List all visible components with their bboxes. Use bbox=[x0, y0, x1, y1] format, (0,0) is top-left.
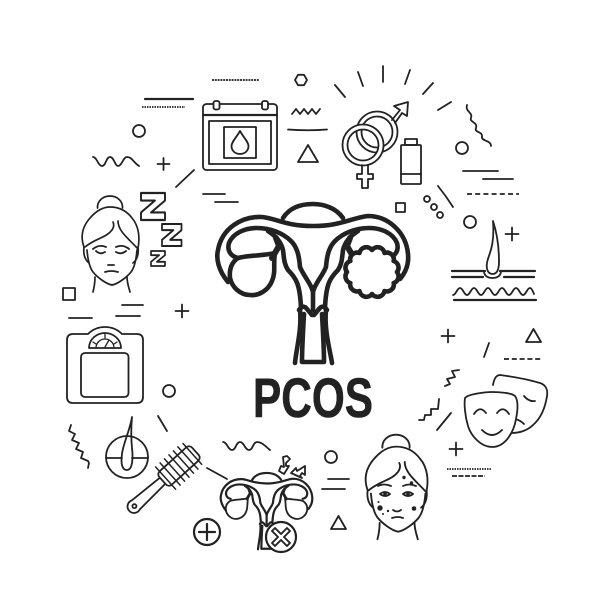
icon: plus in circle bbox=[194, 519, 220, 545]
acne spots bbox=[377, 476, 416, 515]
icon: hair follicle on skin bbox=[452, 221, 536, 300]
cross badge bbox=[266, 522, 296, 552]
eyes and mouth bbox=[378, 484, 416, 518]
icon: hair brush bbox=[119, 440, 205, 522]
title: PCOS bbox=[253, 366, 373, 429]
ovaries bbox=[226, 498, 307, 519]
icon: calendar with drop bbox=[203, 101, 277, 170]
icon: uterus with cross bbox=[221, 456, 312, 552]
icon: theatre masks bbox=[465, 375, 547, 447]
icon: reproductive system bbox=[217, 204, 408, 363]
right polycystic ovary bbox=[345, 247, 399, 297]
decorative marks bbox=[63, 66, 542, 529]
icon: weighing scale bbox=[67, 327, 143, 403]
icon: gender symbols bbox=[342, 102, 408, 188]
icon: hair follicle circle bbox=[106, 417, 148, 478]
icon: woman with acne bbox=[366, 435, 428, 539]
left ovary bbox=[230, 253, 275, 295]
closed eyes and mouth bbox=[93, 246, 129, 272]
icon: sleeping woman bbox=[82, 193, 182, 292]
pain arrows bbox=[279, 456, 305, 478]
icon: battery bbox=[401, 139, 421, 184]
sleep symbols bbox=[141, 193, 182, 266]
